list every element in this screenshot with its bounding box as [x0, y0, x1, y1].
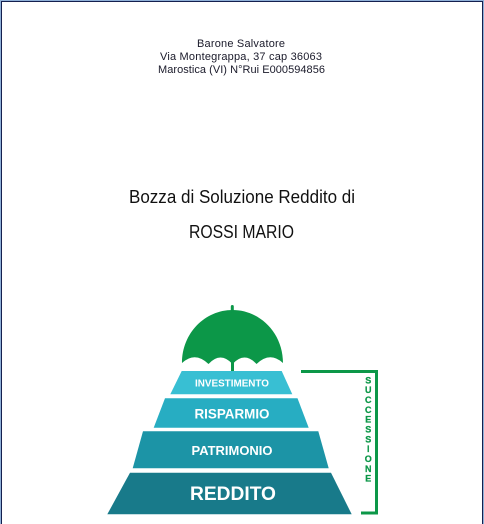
- level: patrimonio: PATRIMONIO: [192, 444, 273, 458]
- label: successione: U: [365, 385, 372, 395]
- level: reddito: REDDITO: [190, 484, 276, 505]
- header: address block: Via Montegrappa, 37 cap 36063: [160, 51, 322, 63]
- title: Bozza di Soluzione Reddito di: [129, 187, 355, 207]
- level: risparmio: RISPARMIO: [194, 406, 270, 422]
- label: successione: C: [365, 395, 372, 405]
- bracket: succession: [301, 372, 376, 513]
- icon: green umbrella: [182, 305, 283, 371]
- label: successione: S: [365, 375, 371, 385]
- label: successione: S: [365, 434, 371, 444]
- header: address block: [158, 38, 325, 76]
- label: successione: N: [365, 464, 372, 474]
- label: successione: E: [365, 415, 371, 425]
- label: successione: E: [365, 474, 371, 484]
- level: risparmio: [154, 398, 309, 428]
- level: investimento: [170, 371, 292, 394]
- label: successione: [365, 375, 372, 484]
- label: successione: S: [365, 424, 371, 434]
- title: [129, 187, 355, 242]
- level: investimento: INVESTIMENTO: [195, 378, 269, 390]
- label: successione: C: [365, 405, 372, 415]
- header: address block: Barone Salvatore: [197, 38, 285, 50]
- pyramid: [107, 371, 352, 514]
- header: address block: Marostica (VI) N°Rui E000594856: [158, 64, 325, 76]
- label: successione: O: [365, 454, 372, 464]
- title: ROSSI MARIO: [189, 222, 294, 242]
- level: reddito: [107, 473, 352, 514]
- label: successione: I: [367, 444, 370, 454]
- level: patrimonio: [133, 431, 329, 468]
